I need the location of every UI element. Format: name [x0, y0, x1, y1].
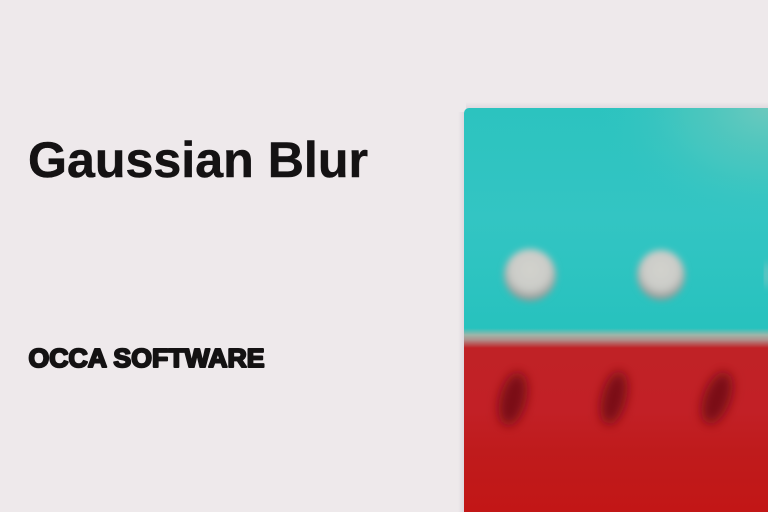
dark seed 2: [596, 369, 632, 427]
title: Gaussian Blur: [28, 132, 368, 188]
blurred image panel: [464, 108, 768, 512]
white circle 1: [504, 249, 556, 301]
image shadow left: [458, 112, 465, 512]
white circle 2: [637, 250, 685, 300]
corner highlight: [646, 108, 768, 192]
image shadow top: [466, 102, 768, 109]
dark seed 1: [494, 370, 532, 428]
brand name: OCCA SOFTWARE: [28, 343, 264, 373]
dark seed 3: [696, 368, 738, 428]
white circle 3 partial: [765, 262, 768, 288]
teal and red background: [464, 108, 768, 512]
